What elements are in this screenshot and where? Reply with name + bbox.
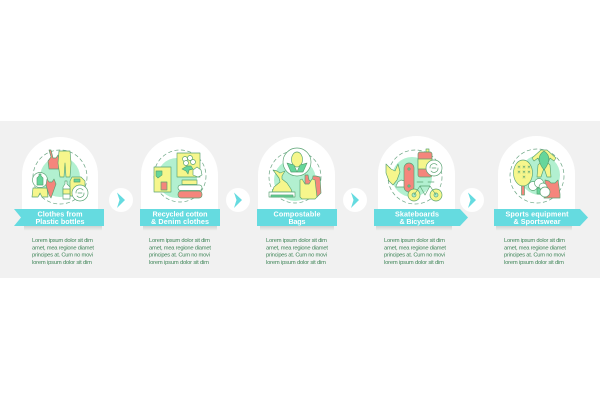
ribbon: notched title band bbox=[14, 209, 104, 230]
heading bbox=[274, 210, 320, 226]
text block: amet, mea regione diamet bbox=[149, 245, 211, 251]
text block bbox=[504, 238, 566, 266]
ribbon: arrow title band bbox=[374, 209, 468, 230]
heading bbox=[151, 210, 209, 226]
arrow: step 4 to 5 bbox=[460, 188, 484, 212]
text block bbox=[149, 238, 211, 266]
icon: skateboard, can and bicycle bbox=[386, 149, 442, 204]
panel: skateboards and bicycles bbox=[374, 136, 468, 266]
text block: amet, mea regione diamet bbox=[504, 245, 566, 251]
icon: stamp, denim and towels bbox=[154, 150, 206, 202]
text block bbox=[32, 238, 94, 266]
ribbon: title band bbox=[140, 209, 220, 230]
heading bbox=[395, 210, 439, 226]
text block: lorem ipsum dolor sit dim bbox=[32, 260, 92, 266]
text block: Lorem ipsum dolor sit dim bbox=[32, 238, 93, 244]
panel: clothes from plastic bottles bbox=[14, 137, 104, 266]
heading bbox=[506, 210, 569, 226]
text block: Lorem ipsum dolor sit dim bbox=[149, 238, 210, 244]
text block: lorem ipsum dolor sit dim bbox=[384, 260, 444, 266]
text block: lorem ipsum dolor sit dim bbox=[266, 260, 326, 266]
text block: Lorem ipsum dolor sit dim bbox=[266, 238, 327, 244]
text block: principes at. Cum no movi bbox=[504, 253, 565, 259]
card arch bbox=[498, 136, 575, 210]
heading: Plastic bottles bbox=[36, 217, 84, 226]
gray background band bbox=[0, 121, 600, 278]
card arch bbox=[258, 137, 335, 210]
heading: Sports equipment bbox=[506, 210, 569, 218]
text block bbox=[266, 238, 328, 266]
heading: & Sportswear bbox=[514, 217, 561, 226]
heading: Clothes from bbox=[38, 210, 82, 218]
arrow: step 2 to 3 bbox=[226, 188, 250, 212]
text block: principes at. Cum no movi bbox=[384, 253, 445, 259]
heading: Compostable bbox=[274, 210, 320, 218]
text block: amet, mea regione diamet bbox=[266, 245, 328, 251]
icon: clothes and bottles bbox=[32, 150, 88, 204]
icon: corn and bags bbox=[269, 148, 321, 203]
text block: Lorem ipsum dolor sit dim bbox=[504, 238, 565, 244]
panel: compostable bags bbox=[257, 137, 337, 266]
panel: sports equipment and sportswear bbox=[494, 136, 588, 266]
card arch bbox=[378, 136, 455, 210]
icon: racket, wetsuit and cotton bbox=[510, 149, 564, 203]
panel: recycled cotton and denim bbox=[140, 137, 220, 266]
heading: Skateboards bbox=[395, 210, 439, 218]
text block: principes at. Cum no movi bbox=[149, 253, 210, 259]
heading: Bags bbox=[288, 217, 306, 226]
text block: lorem ipsum dolor sit dim bbox=[149, 260, 209, 266]
text block: lorem ipsum dolor sit dim bbox=[504, 260, 564, 266]
heading: & Bicycles bbox=[400, 217, 434, 226]
heading bbox=[36, 210, 84, 226]
card arch bbox=[22, 137, 98, 210]
arrow: step 3 to 4 bbox=[343, 188, 367, 212]
text block: principes at. Cum no movi bbox=[32, 253, 93, 259]
text block bbox=[384, 238, 446, 266]
heading: & Denim clothes bbox=[151, 217, 209, 226]
text block: amet, mea regione diamet bbox=[384, 245, 446, 251]
arrow: step 1 to 2 bbox=[109, 188, 133, 212]
card arch bbox=[141, 137, 218, 210]
ribbon: title band bbox=[257, 209, 337, 230]
text block: principes at. Cum no movi bbox=[266, 253, 327, 259]
ribbon: arrow title band bbox=[494, 209, 588, 230]
text block: Lorem ipsum dolor sit dim bbox=[384, 238, 445, 244]
heading: Recycled cotton bbox=[152, 210, 208, 218]
text block: amet, mea regione diamet bbox=[32, 245, 94, 251]
